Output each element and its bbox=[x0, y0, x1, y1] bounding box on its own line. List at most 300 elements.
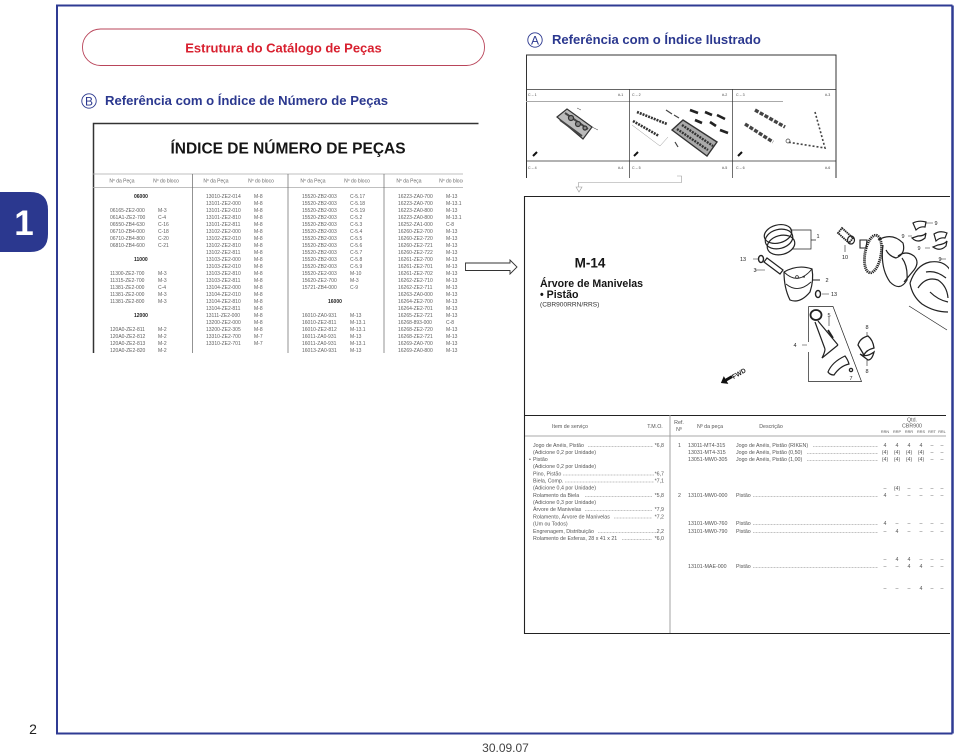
index column 2: M-8 bbox=[254, 215, 263, 221]
quantity matrix: – bbox=[884, 486, 887, 492]
index column headers bbox=[110, 178, 463, 184]
part numbers: 13101-MAE-000 bbox=[688, 564, 727, 570]
index column 4: M-13 bbox=[446, 194, 458, 200]
thumbnail labels: #-3 bbox=[825, 93, 830, 97]
main bearings bbox=[908, 221, 947, 259]
index column 3: C-5.17 bbox=[350, 194, 365, 200]
index column 3: 15721-ZB4-000 bbox=[302, 285, 337, 291]
index column 3: 15520-ZB2-003 bbox=[302, 243, 337, 249]
quantity matrix: – bbox=[896, 564, 899, 570]
index column 3: C-9 bbox=[350, 285, 358, 291]
thumbnail labels: #-5 bbox=[722, 166, 727, 170]
index column 1: 120A0-ZE2-820 bbox=[110, 348, 146, 354]
index column 3: M-13.1 bbox=[350, 327, 366, 333]
quantity matrix: – bbox=[941, 486, 944, 492]
index column 2: 13101-ZE2-010 bbox=[206, 208, 241, 214]
diagram callout numbers: 2 bbox=[825, 278, 829, 284]
index column 1: 11315-ZE2-700 bbox=[110, 278, 145, 284]
index column headers: Nº do bloco bbox=[153, 178, 179, 184]
index column 4: 16252-ZA1-000 bbox=[398, 222, 433, 228]
index column 1: 120A0-ZE2-813 bbox=[110, 341, 146, 347]
index column 1: C-18 bbox=[158, 229, 169, 235]
quantity matrix: – bbox=[941, 493, 944, 499]
parts table header bbox=[552, 418, 946, 434]
quantity matrix: – bbox=[920, 486, 923, 492]
needle bearing bbox=[838, 228, 854, 252]
part numbers: 13031-MT4-315 bbox=[688, 450, 726, 456]
diagram callout numbers: 13 bbox=[831, 292, 837, 298]
index column 4: 16260-ZE2-721 bbox=[398, 243, 433, 249]
parts table header: Ref. bbox=[674, 420, 684, 426]
index column 4: 16223-ZA0-700 bbox=[398, 201, 433, 207]
quantity matrix: – bbox=[908, 521, 911, 527]
index column 3: 15520-ZB2-003 bbox=[302, 264, 337, 270]
index column 1: 06710-ZB4-800 bbox=[110, 236, 145, 242]
parts table header: Qtd. bbox=[907, 418, 917, 424]
index column 3: 15520-ZB2-003 bbox=[302, 201, 337, 207]
index column 4: 16263-ZA0-000 bbox=[398, 292, 433, 298]
diagram callout numbers: 13 bbox=[740, 257, 746, 263]
index column 2: 13103-ZE2-000 bbox=[206, 257, 241, 263]
index column 2: M-8 bbox=[254, 320, 263, 326]
index column 3: 15520-ZB2-003 bbox=[302, 222, 337, 228]
index column 3 bbox=[302, 194, 366, 354]
heading A: Referência com o Índice Ilustrado bbox=[552, 32, 761, 47]
diagram callout numbers: 9 bbox=[901, 234, 905, 240]
service items list: Biela, Comp. bbox=[533, 478, 563, 484]
index column 3: 16011-ZA0-931 bbox=[302, 341, 337, 347]
title pill bbox=[82, 29, 484, 66]
quantity matrix: – bbox=[941, 586, 944, 592]
index column 2: 13102-ZE2-811 bbox=[206, 250, 241, 256]
quantity matrix: (4) bbox=[882, 457, 888, 463]
index column 4 bbox=[398, 194, 462, 354]
index column 3: C-5.18 bbox=[350, 201, 365, 207]
service items list: Rolamento de Esferas, 28 x 41 x 21 bbox=[533, 536, 617, 542]
quantity matrix: (4) bbox=[906, 457, 912, 463]
index column 2: M-8 bbox=[254, 243, 263, 249]
index title: ÍNDICE DE NÚMERO DE PEÇAS bbox=[170, 140, 406, 158]
quantity matrix: 4 bbox=[884, 521, 887, 527]
index column 3: 15520-ZB2-003 bbox=[302, 250, 337, 256]
index column 2: 13101-ZE2-811 bbox=[206, 222, 241, 228]
index column 4: C-8 bbox=[446, 222, 454, 228]
index column 3: C-5.7 bbox=[350, 250, 362, 256]
quantity matrix: – bbox=[908, 586, 911, 592]
quantity matrix: – bbox=[931, 564, 934, 570]
quantity matrix: – bbox=[941, 564, 944, 570]
quantity matrix: (4) bbox=[882, 450, 888, 456]
quantity matrix: – bbox=[931, 486, 934, 492]
service items list: Pino, Pistão bbox=[533, 472, 561, 478]
index column 4: M-13.1 bbox=[446, 201, 462, 207]
diagram callout numbers: 8 bbox=[865, 369, 869, 375]
service items list: *6,8 bbox=[655, 443, 664, 449]
part descriptions: Jogo de Anéis, Pistão (0,50) bbox=[736, 450, 802, 456]
index column 1: 06000 bbox=[134, 194, 148, 200]
index column 2 bbox=[206, 194, 263, 347]
quantity matrix: – bbox=[884, 557, 887, 563]
index column 2: 13102-ZE2-810 bbox=[206, 243, 241, 249]
thumbnail labels: #-4 bbox=[618, 166, 623, 170]
index column 1: C-4 bbox=[158, 215, 166, 221]
index column 1: M-2 bbox=[158, 341, 167, 347]
index column 4: 16268-893-000 bbox=[398, 320, 432, 326]
quantity matrix: – bbox=[931, 443, 934, 449]
thumbnail labels: #-6 bbox=[825, 166, 830, 170]
index column headers: Nº do bloco bbox=[439, 178, 465, 184]
page number: 2 bbox=[29, 721, 37, 737]
index column 4: M-13 bbox=[446, 208, 458, 214]
index column 2: 13103-ZE2-010 bbox=[206, 264, 241, 270]
index column headers: Nº do bloco bbox=[248, 178, 274, 184]
diagram callout numbers: 9 bbox=[938, 257, 942, 263]
index column 4: 16264-ZE2-700 bbox=[398, 299, 433, 305]
diagram callout numbers: 8 bbox=[865, 325, 869, 331]
quantity matrix: 4 bbox=[884, 493, 887, 499]
part descriptions: Pistão bbox=[736, 521, 751, 527]
service items list: (Um ou Todos) bbox=[533, 522, 568, 528]
index column 3: C-5.5 bbox=[350, 236, 362, 242]
index column 3: C-5.9 bbox=[350, 264, 362, 270]
index column 4: 16262-ZE2-710 bbox=[398, 278, 433, 284]
service items list: (Adicione 0,3 por Unidade) bbox=[533, 500, 596, 506]
thumbnail: cylinder head cover bbox=[533, 108, 598, 156]
index column 1: 120A0-ZE2-812 bbox=[110, 334, 146, 340]
index column 4: M-13 bbox=[446, 348, 458, 354]
panel: part number index bbox=[93, 124, 478, 354]
index column 4: M-13 bbox=[446, 257, 458, 263]
index column 3: M-10 bbox=[350, 271, 362, 277]
index column 4: M-13 bbox=[446, 327, 458, 333]
index column 2: M-8 bbox=[254, 201, 263, 207]
index column 2: 13104-ZE2-000 bbox=[206, 285, 241, 291]
chapter tab bbox=[0, 192, 48, 252]
service items list: Jogo de Anéis, Pistão bbox=[533, 443, 584, 449]
index column 2: 13010-ZE2-014 bbox=[206, 194, 241, 200]
service items list: Engrenagem, Distribuição bbox=[533, 529, 594, 535]
quantity matrix: 4 bbox=[920, 586, 923, 592]
service items list: Rolamento da Biela bbox=[533, 493, 579, 499]
index column headers: Nº da Peça bbox=[300, 178, 326, 184]
quantity matrix: – bbox=[931, 521, 934, 527]
index column 2: M-8 bbox=[254, 250, 263, 256]
thumbnail: cylinder head exploded bbox=[632, 110, 728, 156]
thumbnail labels: #-2 bbox=[722, 93, 727, 97]
service items list: Pistão bbox=[533, 457, 548, 463]
index column 4: M-13 bbox=[446, 278, 458, 284]
index column 2: M-8 bbox=[254, 306, 263, 312]
part numbers: 13051-MW0-305 bbox=[688, 457, 728, 463]
quantity matrix: – bbox=[884, 586, 887, 592]
index column 2: M-8 bbox=[254, 327, 263, 333]
index column 2: M-8 bbox=[254, 313, 263, 319]
quantity matrix: (4) bbox=[894, 450, 900, 456]
quantity matrix: – bbox=[931, 450, 934, 456]
index column 4: M-13 bbox=[446, 250, 458, 256]
index column 2: 13101-ZE2-000 bbox=[206, 201, 241, 207]
part descriptions: Pistão bbox=[736, 529, 751, 535]
index column 1: 11000 bbox=[134, 257, 148, 263]
index column 3: 16013-ZA0-931 bbox=[302, 348, 337, 354]
quantity matrix: – bbox=[908, 486, 911, 492]
quantity matrix bbox=[882, 443, 944, 592]
part numbers: 13011-MT4-315 bbox=[688, 443, 725, 449]
index column 4: M-13 bbox=[446, 299, 458, 305]
service items list: *5,8 bbox=[655, 493, 664, 499]
quantity matrix: – bbox=[941, 529, 944, 535]
quantity matrix: – bbox=[931, 457, 934, 463]
index column 3: 16010-ZE2-811 bbox=[302, 320, 337, 326]
part numbers: 13101-MW0-790 bbox=[688, 529, 728, 535]
quantity matrix: – bbox=[941, 443, 944, 449]
index column 1: 06550-ZB4-630 bbox=[110, 222, 145, 228]
quantity matrix: 4 bbox=[920, 443, 923, 449]
index column 3: M-13.1 bbox=[350, 341, 366, 347]
part numbers: 2 bbox=[678, 493, 681, 499]
index column 2: M-8 bbox=[254, 208, 263, 214]
index column 2: 13103-ZE2-811 bbox=[206, 278, 241, 284]
quantity matrix: – bbox=[931, 529, 934, 535]
service items list: (Adicione 0,4 por Unidade) bbox=[533, 486, 596, 492]
index column 3: M-13 bbox=[350, 313, 362, 319]
index column 3: C-5.4 bbox=[350, 229, 362, 235]
exploded diagram: crankshaft and piston bbox=[719, 221, 950, 387]
index column 1: 120A0-ZE2-811 bbox=[110, 327, 145, 333]
index column 3: 15520-ZB2-003 bbox=[302, 257, 337, 263]
index column 1: M-3 bbox=[158, 271, 167, 277]
index column 2: 13310-ZE2-700 bbox=[206, 334, 241, 340]
quantity matrix: 4 bbox=[920, 564, 923, 570]
index column 1: M-2 bbox=[158, 334, 167, 340]
parts table header: Nº da peça bbox=[697, 424, 723, 430]
index column 2: 13101-ZE2-810 bbox=[206, 215, 241, 221]
index column 1: 11300-ZE2-700 bbox=[110, 271, 145, 277]
index column 4: 16269-ZA0-800 bbox=[398, 348, 433, 354]
index column 1: 06810-ZB4-600 bbox=[110, 243, 145, 249]
title pill: Estrutura do Catálogo de Peças bbox=[185, 40, 382, 56]
parts table header: RRN bbox=[881, 430, 889, 434]
quantity matrix: 4 bbox=[908, 557, 911, 563]
index column 2: M-8 bbox=[254, 285, 263, 291]
part numbers: 13101-MW0-760 bbox=[688, 521, 728, 527]
quantity matrix: – bbox=[896, 521, 899, 527]
part descriptions: Jogo de Anéis, Pistão (1,00) bbox=[736, 457, 802, 463]
index column 4: C-8 bbox=[446, 320, 454, 326]
quantity matrix: (4) bbox=[894, 457, 900, 463]
index column 1: C-4 bbox=[158, 285, 166, 291]
index column 2: M-8 bbox=[254, 257, 263, 263]
index column 4: M-13 bbox=[446, 243, 458, 249]
part numbers: 13101-MW0-000 bbox=[688, 493, 728, 499]
index column headers: Nº da Peça bbox=[109, 178, 135, 184]
index column 4: 16260-ZE2-722 bbox=[398, 250, 433, 256]
thumbnail labels: C – 6 bbox=[736, 166, 745, 170]
index column 4: M-13 bbox=[446, 313, 458, 319]
service items list: *6,0 bbox=[655, 536, 664, 542]
parts table header: Item de serviço bbox=[552, 424, 588, 430]
index column 1: 11381-ZE2-800 bbox=[110, 299, 145, 305]
index column 3: M-13 bbox=[350, 334, 362, 340]
quantity matrix: 4 bbox=[884, 443, 887, 449]
thumbnail: camshafts and cam chain bbox=[738, 110, 825, 156]
index column 3: 16011-ZA0-931 bbox=[302, 334, 337, 340]
diagram callout numbers: 9 bbox=[917, 246, 921, 252]
quantity matrix: (4) bbox=[906, 450, 912, 456]
quantity matrix: – bbox=[920, 493, 923, 499]
index column 4: 16223-ZA0-800 bbox=[398, 208, 433, 214]
page heading: (CBR900RRN/RRS) bbox=[540, 302, 599, 308]
index column 3: 16010-ZA0-931 bbox=[302, 313, 337, 319]
service items list: (Adicione 0,2 por Unidade) bbox=[533, 464, 596, 470]
index column 4: 16260-ZE2-720 bbox=[398, 236, 433, 242]
quantity matrix: – bbox=[920, 557, 923, 563]
index column headers: Nº do bloco bbox=[344, 178, 370, 184]
service items list bbox=[529, 443, 664, 542]
service items list: *7,2 bbox=[655, 514, 664, 520]
service items list: (Adicione 0,2 por Unidade) bbox=[533, 450, 596, 456]
quantity matrix: 4 bbox=[908, 443, 911, 449]
quantity matrix: (4) bbox=[894, 486, 900, 492]
index column 4: M-13 bbox=[446, 341, 458, 347]
piston bbox=[784, 267, 820, 301]
quantity matrix: – bbox=[931, 493, 934, 499]
index column 3: C-5.19 bbox=[350, 208, 365, 214]
chapter tab: 1 bbox=[14, 204, 34, 243]
index column 2: 13111-ZE2-000 bbox=[206, 313, 240, 319]
quantity matrix: – bbox=[884, 564, 887, 570]
index column 1: 06710-ZB4-000 bbox=[110, 229, 145, 235]
parts table header: Descrição bbox=[759, 424, 783, 430]
service items list: Árvore de Manivelas bbox=[533, 506, 582, 513]
page heading bbox=[540, 256, 643, 308]
page heading: Árvore de Manivelas bbox=[540, 277, 643, 290]
quantity matrix: – bbox=[920, 529, 923, 535]
index column 3: 15520-ZB2-003 bbox=[302, 194, 337, 200]
index column 1: 061A1-ZE2-700 bbox=[110, 215, 146, 221]
diagram callout numbers: 7 bbox=[849, 376, 853, 382]
piston rings bbox=[764, 224, 816, 256]
quantity matrix: – bbox=[896, 493, 899, 499]
parts table header: RRP bbox=[893, 430, 901, 434]
index column 4: 16262-ZE2-711 bbox=[398, 285, 433, 291]
quantity matrix: – bbox=[941, 521, 944, 527]
heading B: Referência com o Índice de Número de Peças bbox=[105, 93, 388, 108]
diagram callout numbers bbox=[740, 221, 942, 382]
quantity matrix: – bbox=[941, 457, 944, 463]
fwd arrow: FWD bbox=[731, 367, 748, 381]
index column 1: M-3 bbox=[158, 208, 167, 214]
quantity matrix: – bbox=[884, 529, 887, 535]
quantity matrix: – bbox=[920, 521, 923, 527]
index column 3: 15620-ZE2-700 bbox=[302, 278, 337, 284]
service items list: Rolamento, Árvore de Manivelas bbox=[533, 514, 610, 520]
quantity matrix: – bbox=[931, 586, 934, 592]
index column 3: M-3 bbox=[350, 278, 359, 284]
connecting rod assembly bbox=[802, 306, 874, 382]
index column 4: M-13 bbox=[446, 285, 458, 291]
page heading: • Pistão bbox=[540, 289, 579, 301]
index column 2: 13102-ZE2-000 bbox=[206, 229, 241, 235]
diagram callout numbers: 4 bbox=[793, 343, 797, 349]
quantity matrix: 4 bbox=[896, 443, 899, 449]
index column 1 bbox=[110, 194, 169, 354]
index column 4: 16261-ZE2-701 bbox=[398, 264, 433, 270]
index column 3: 15520-ZB2-003 bbox=[302, 208, 337, 214]
index column 1: 12000 bbox=[134, 313, 148, 319]
index column 1: M-3 bbox=[158, 292, 167, 298]
thumbnail labels: C – 2 bbox=[632, 93, 641, 97]
index column 2: 13103-ZE2-810 bbox=[206, 271, 241, 277]
connector arrow to detail page bbox=[576, 176, 682, 192]
part descriptions: Pistão bbox=[736, 564, 751, 570]
service items list: 2,2 bbox=[657, 529, 664, 535]
index column 4: M-13.1 bbox=[446, 215, 462, 221]
thumbnail labels bbox=[528, 93, 830, 170]
parts table header: RRS bbox=[917, 430, 925, 434]
service items list: *7,1 bbox=[655, 478, 664, 484]
service items list: • bbox=[529, 457, 531, 463]
index column 2: M-8 bbox=[254, 194, 263, 200]
index column 2: 13104-ZE2-811 bbox=[206, 306, 241, 312]
index column 2: M-7 bbox=[254, 334, 263, 340]
index column 1: C-21 bbox=[158, 243, 169, 249]
index column 3: C-5.3 bbox=[350, 222, 362, 228]
part descriptions: Jogo de Anéis, Pistão (RIKEN) bbox=[736, 443, 808, 449]
panel: illustrated index bbox=[526, 55, 836, 192]
index column 4: 16260-ZE2-700 bbox=[398, 229, 433, 235]
index column 2: M-8 bbox=[254, 292, 263, 298]
heading B: B bbox=[85, 94, 93, 108]
quantity matrix: – bbox=[941, 557, 944, 563]
index column 3: 16010-ZE2-812 bbox=[302, 327, 337, 333]
quantity matrix: 4 bbox=[896, 557, 899, 563]
index column 3: 15520-ZE2-003 bbox=[302, 271, 337, 277]
index column 2: M-8 bbox=[254, 236, 263, 242]
quantity matrix: 4 bbox=[896, 529, 899, 535]
index column 2: M-8 bbox=[254, 222, 263, 228]
index column 1: C-20 bbox=[158, 236, 169, 242]
index column 4: M-13 bbox=[446, 306, 458, 312]
index column 2: 13200-ZE2-305 bbox=[206, 327, 241, 333]
index column 4: 16261-ZE2-700 bbox=[398, 257, 433, 263]
index column 1: M-3 bbox=[158, 299, 167, 305]
index column 3: C-5.8 bbox=[350, 257, 362, 263]
index column 1: C-16 bbox=[158, 222, 169, 228]
index column 2: 13200-ZE2-000 bbox=[206, 320, 241, 326]
index column 3: 16000 bbox=[328, 299, 342, 305]
thumbnail labels: C – 1 bbox=[528, 93, 537, 97]
panel: page M-14 bbox=[524, 196, 950, 634]
index column 1: 11381-ZE2-000 bbox=[110, 292, 145, 298]
fwd arrow bbox=[720, 368, 746, 384]
index column 2: M-8 bbox=[254, 278, 263, 284]
parts table header: Nº bbox=[676, 427, 682, 433]
index column 1: M-2 bbox=[158, 327, 167, 333]
quantity matrix: (4) bbox=[918, 450, 924, 456]
index column 2: M-8 bbox=[254, 264, 263, 270]
index column 3: C-5.6 bbox=[350, 243, 362, 249]
parts table header: T.M.O. bbox=[647, 424, 663, 430]
hollow arrow bbox=[466, 260, 517, 274]
parts table header: CBR900 bbox=[902, 424, 922, 430]
index column 3: 15520-ZB2-003 bbox=[302, 215, 337, 221]
index column 2: 13102-ZE2-010 bbox=[206, 236, 241, 242]
quantity matrix: – bbox=[941, 450, 944, 456]
diagram callout numbers: 3 bbox=[753, 268, 757, 274]
index column 1: M-3 bbox=[158, 278, 167, 284]
index column 4: 16223-ZA0-800 bbox=[398, 215, 433, 221]
